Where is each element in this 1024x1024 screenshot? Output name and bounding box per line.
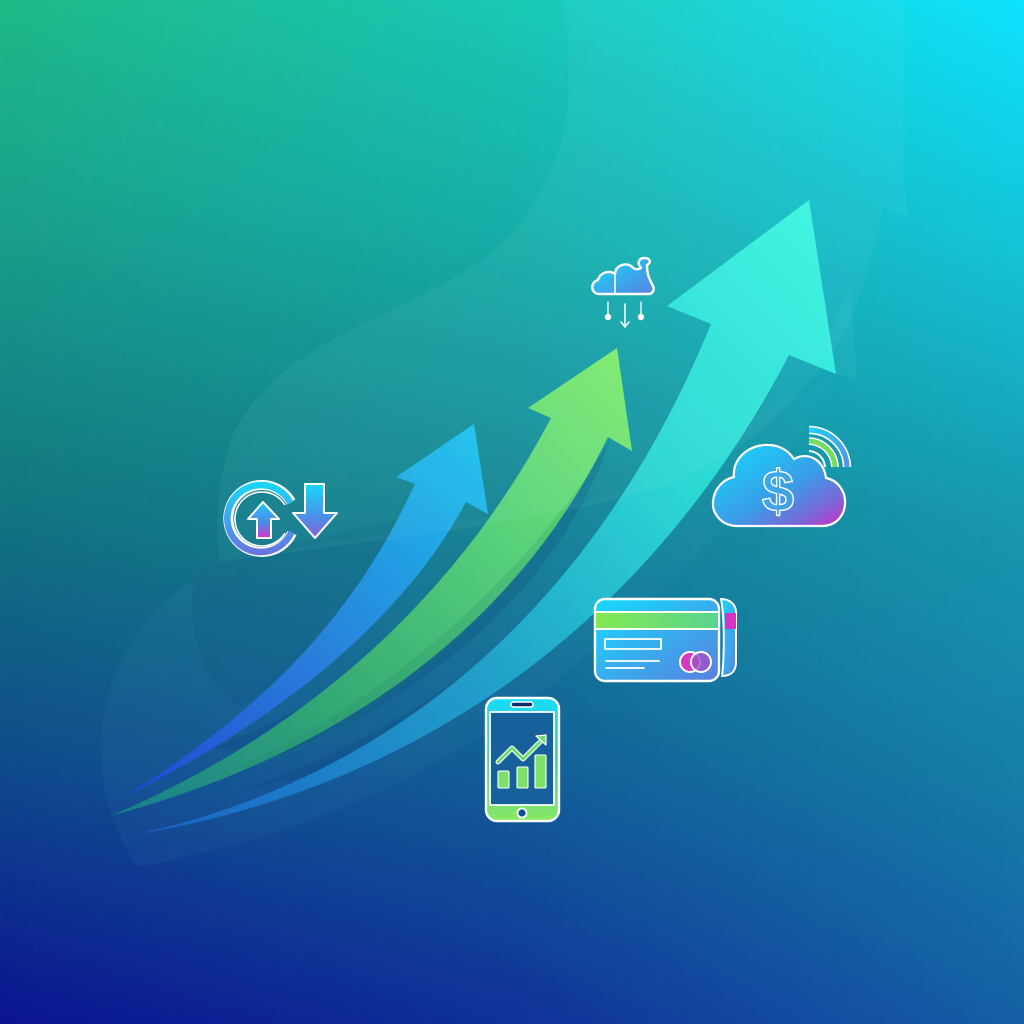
icon: small cloud with down arrows [592,258,654,327]
icon: refresh circle with up and down arrows [227,484,337,552]
ghost arrow head behind large arrow [826,287,857,381]
arrow: cyan large [138,200,836,834]
arrow: green medium [110,348,632,816]
background upper swoosh overlay [217,0,909,562]
icon: credit card [595,599,736,681]
icon: smartphone with chart [486,698,559,821]
dollar sign: $ [762,459,794,524]
background lower swooshes [101,374,836,867]
icon: cloud with dollar and wifi [713,430,847,526]
arrow: blue small [122,424,488,798]
green arrow shaded lower strip [230,437,608,770]
